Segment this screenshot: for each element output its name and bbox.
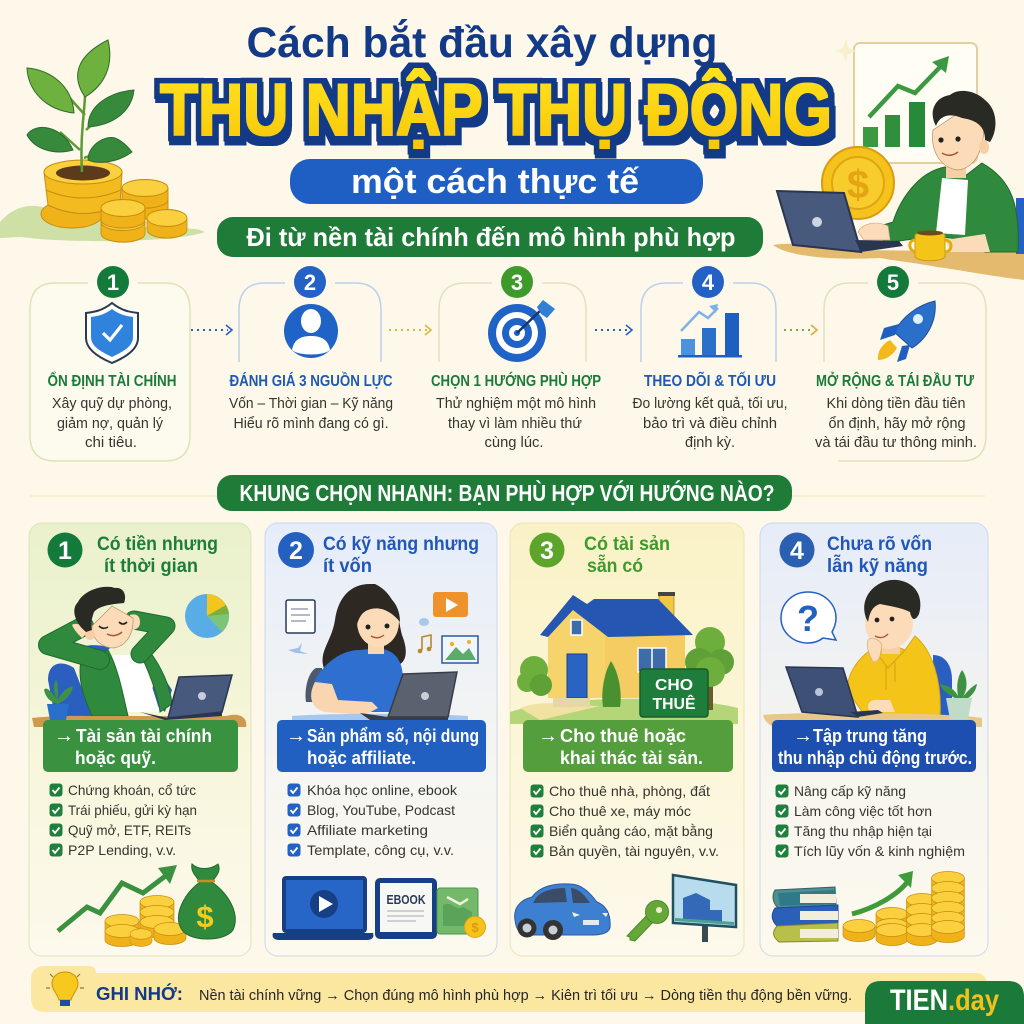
illustration: car, key and billboard [515,875,736,942]
description: và tái đầu tư thông minh. [815,434,977,451]
panel 2: có kỹ năng nhưng ít vốn [265,523,497,956]
badge 1 [48,532,82,568]
description: Đo lường kết quả, tối ưu, [632,395,788,412]
conclusion box: hoặc affiliate. [307,748,416,768]
card outline [239,283,381,362]
heading: ĐÁNH GIÁ 3 NGUỒN LỰC [230,371,393,390]
section heading pill: Khung chọn nhanh [30,475,985,511]
checklist: Cho thuê nhà, phòng, đất [549,783,710,799]
description [815,395,977,451]
badge 4: 4 [702,270,715,295]
illustration: laptop, ebook and green card: $ [471,920,479,935]
description [52,395,172,451]
card outline [30,283,190,461]
panel heading: sẵn có [587,554,643,577]
description: Vốn – Thời gian – Kỹ năng [229,395,393,412]
illustration: growth arrow, coins and money bag [58,864,235,946]
illustration: laptop, ebook and green card [273,876,486,940]
description [632,395,788,451]
description: bảo trì và điều chỉnh [643,415,777,432]
section heading pill: Khung chọn nhanh: KHUNG CHỌN NHANH: BẠN PHÙ HỢP VỚI HƯỚNG NÀO? [240,479,774,506]
arrow step 3 to 4 [595,325,632,335]
description: giảm nợ, quản lý [57,415,163,432]
illustration: growth arrow, coins and money bag: $ [196,899,214,934]
badge 2: 2 [289,537,303,565]
description: chi tiêu. [85,434,137,451]
panel heading: ít thời gian [104,556,198,577]
panel heading: Chưa rõ vốn [827,534,932,555]
panel heading: ít vốn [323,556,372,577]
conclusion box: khai thác tài sản. [560,748,703,768]
panel 3: có tài sản sẵn có [510,523,744,956]
conclusion box: → [793,725,813,747]
rent sign: THUÊ [652,694,696,713]
checklist [50,782,197,858]
description: thay vì làm nhiều thứ [448,415,582,432]
checklist: Làm công việc tốt hơn [794,803,932,819]
panel heading: Có tiền nhưng [97,534,218,555]
panel heading: lẫn kỹ năng [827,555,928,577]
description: cùng lúc. [484,434,544,451]
panel heading [827,534,932,577]
badge 3 [501,266,533,298]
checklist: Nâng cấp kỹ năng [794,783,906,799]
checklist [776,783,965,859]
badge 2 [278,532,314,568]
subtitle pill: một cách thực tế [290,159,703,204]
badge 3: 3 [511,270,523,295]
illustration: man with laptop, chart board and coin: $ [847,163,869,207]
checklist: Blog, YouTube, Podcast [307,802,455,818]
badge 1: 1 [107,270,119,295]
illustration: thinking man with question bubble: ? [797,598,819,639]
step 2 card [229,266,393,432]
checklist [288,782,458,858]
illustration: man with laptop, chart board and coin [773,38,1024,280]
heading: CHỌN 1 HƯỚNG PHÙ HỢP [431,371,601,390]
conclusion box: Cho thuê hoặc [560,726,686,746]
title main: THU NHẬP THỤ ĐỘNG: THU NHẬP THỤ ĐỘNG [160,70,832,151]
icon: light bulb [46,972,84,1006]
badge 3 [530,532,564,568]
step 3 card [431,266,601,451]
icon: person [284,304,338,358]
badge 4: 4 [790,537,804,565]
checklist: Khóa học online, ebook [307,782,458,798]
checklist: Affiliate marketing [307,822,428,838]
description [436,395,596,451]
illustration: plant growing from coin pot [0,40,205,242]
heading: ỔN ĐỊNH TÀI CHÍNH [48,371,176,390]
card outline [824,283,986,461]
arrow step 4 to 5 [784,325,817,335]
icon: target with arrow [488,300,555,362]
conclusion box [277,720,486,772]
subtitle pill: một cách thực tế: một cách thực tế [351,163,639,201]
step 4 card [632,266,788,451]
conclusion box: Sản phẩm số, nội dung [307,726,479,746]
description [229,395,393,432]
step 5 card [815,266,986,461]
conclusion box: Tài sản tài chính [76,726,212,746]
checklist: Chứng khoán, cổ tức [68,782,196,798]
conclusion box: → [538,725,558,747]
conclusion box: hoặc quỹ. [75,748,156,768]
checklist [530,783,719,859]
panel background [265,523,497,956]
badge 5: 5 [887,270,899,295]
panel heading [323,534,479,577]
description: Hiểu rõ mình đang có gì. [234,415,388,432]
heading: MỞ RỘNG & TÁI ĐẦU TƯ [816,371,975,390]
title line: Cách bắt đầu xây dựng: Cách bắt đầu xây dựng [246,18,718,67]
conclusion box [772,720,976,772]
checklist: Bản quyền, tài nguyên, v.v. [549,843,719,859]
panel 4: chưa rõ vốn lẫn kỹ năng [760,523,988,956]
logo: TIEN.day [865,981,1024,1024]
panel heading: Có tài sản [584,534,670,555]
badge 2: 2 [304,270,316,295]
conclusion box [43,720,238,772]
arrow step 2 to 3 [389,325,431,335]
panel heading: Có kỹ năng nhưng [323,534,479,555]
card outline [641,283,776,362]
panel background [760,523,988,956]
jacket and shirt [880,163,1018,252]
illustration: relaxed man with laptop and pie chart [32,587,246,727]
checklist: Template, công cụ, v.v. [307,842,454,858]
conclusion box: → [286,725,306,747]
panel background [29,523,251,956]
checklist: Tăng thu nhập hiện tại [794,823,932,839]
icon: rocket [878,301,935,362]
badge 2 [294,266,326,298]
description: Thử nghiệm một mô hình [436,395,596,412]
rent sign [640,669,708,717]
label: GHI NHỚ: [96,983,183,1004]
conclusion box: thu nhập chủ động trước. [778,748,972,768]
checklist: P2P Lending, v.v. [68,842,176,858]
badge 4 [692,266,724,298]
reminder bar: ghi nhớ [31,966,987,1012]
arrow step 1 to 2 [191,325,232,335]
panel heading [97,534,218,577]
illustration: woman with laptop and digital content [286,584,478,720]
illustration: laptop, ebook and green card: EBOOK [386,893,426,907]
checklist: Quỹ mở, ETF, REITs [68,822,191,838]
badge 5 [877,266,909,298]
panel heading [584,534,670,577]
conclusion box: → [54,725,74,747]
illustration: thinking man with question bubble [763,580,982,727]
panel 1: có tiền nhưng ít thời gian [29,523,251,956]
checklist: Trái phiếu, gửi kỳ hạn [68,802,197,818]
conclusion box: Tập trung tăng [813,726,927,746]
icon: shield with check [86,303,138,363]
checklist: Biển quảng cáo, mặt bằng [549,823,713,839]
panel background [510,523,744,956]
subheading pill: Đi từ nền tài chính [217,217,763,257]
illustration: house with rent sign [510,592,738,724]
reminder text: Nền tài chính vững → Chọn đúng mô hình phù hợp → Kiên trì tối ưu → Dòng tiền thụ động bền vững. [199,987,852,1004]
conclusion box [523,720,733,772]
badge 1 [97,266,129,298]
illustration: books, coin stacks and arrow [772,871,964,946]
badge 1: 1 [58,537,72,565]
description: định kỳ. [685,434,735,451]
badge 4 [780,532,814,568]
bar background [31,966,987,1012]
logo: TIEN.day: TIEN.day [890,984,999,1017]
step 1 card [30,266,190,461]
card outline [439,283,586,362]
rent sign: CHO [655,677,693,694]
badge 3: 3 [540,537,554,565]
description: Xây quỹ dự phòng, [52,395,172,412]
subheading pill: Đi từ nền tài chính: Đi từ nền tài chính đến mô hình phù hợp [246,222,736,252]
checklist: Tích lũy vốn & kinh nghiệm [794,843,965,859]
heading: THEO DÕI & TỐI ƯU [644,370,776,390]
icon: bar chart with arrow [678,304,742,358]
description: Khi dòng tiền đầu tiên [826,395,966,412]
description: ổn định, hãy mở rộng [828,415,966,432]
checklist: Cho thuê xe, máy móc [549,803,691,819]
